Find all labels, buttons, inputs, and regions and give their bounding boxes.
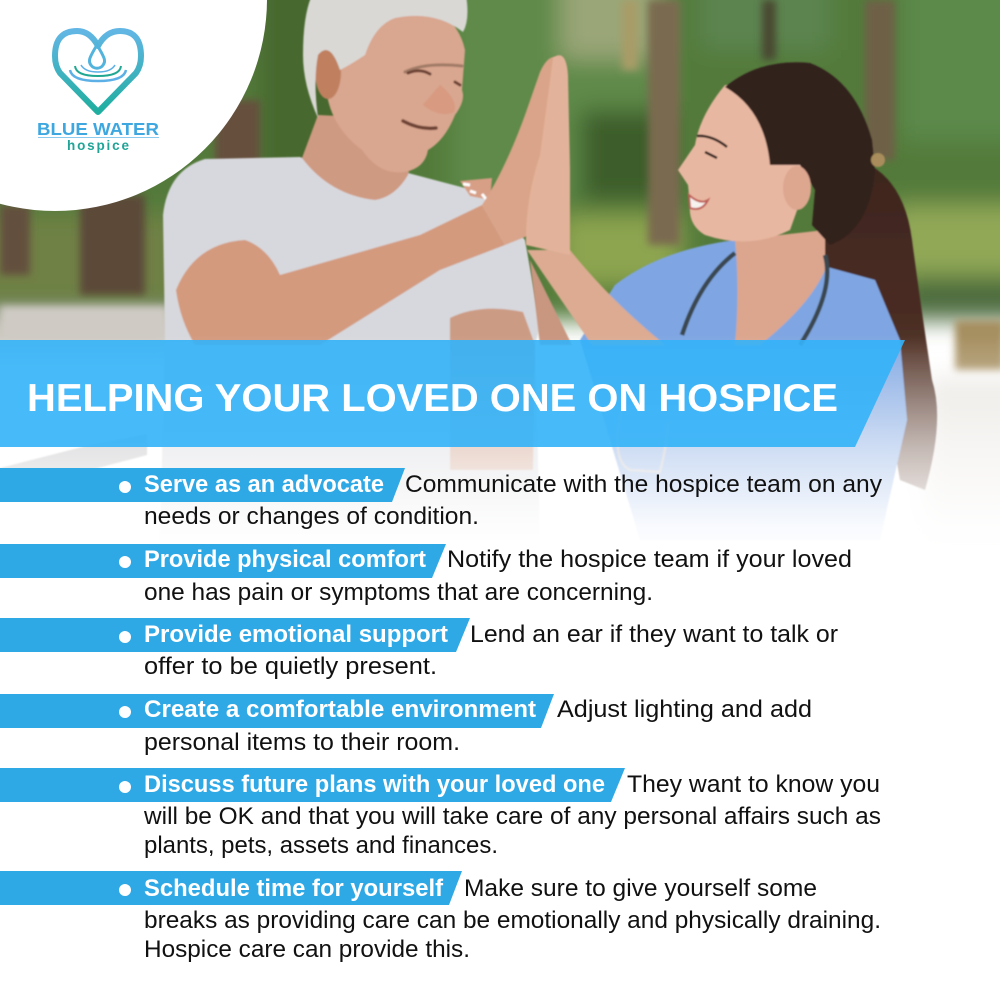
item: discuss future plans: will be OK and that you will take care of any personal affairs such as	[143, 803, 881, 830]
ponytail	[815, 165, 937, 490]
item: provide emotional support: Provide emotional support	[144, 621, 448, 648]
woman brow eye and smile	[697, 136, 727, 158]
photo: woman	[526, 55, 937, 540]
logo tagline: hospice	[67, 138, 129, 153]
item: create a comfortable environment: personal items to their room.	[144, 729, 460, 756]
hair clip	[871, 153, 885, 167]
woman ear	[783, 166, 811, 210]
item: serve as an advocate: needs or changes of condition.	[144, 503, 479, 530]
item: provide physical comfort: Notify the hospice team if your loved	[447, 546, 852, 573]
woman hand	[526, 55, 570, 255]
item: discuss future plans	[0, 768, 881, 859]
title: HELPING YOUR LOVED ONE ON HOSPICE	[27, 377, 838, 420]
man hair	[303, 0, 467, 118]
man arm	[176, 205, 505, 345]
item: serve as an advocate: Communicate with the hospice team on any	[405, 471, 883, 498]
item: provide emotional support: Lend an ear if they want to talk or	[470, 621, 838, 648]
item: schedule time for yourself: breaks as providing care can be emotionally and physically draining.	[144, 907, 881, 934]
logo wordmark: BLUE WATER	[37, 119, 159, 139]
stethoscope	[682, 253, 827, 345]
photo: man	[160, 0, 564, 540]
white fade at base of photo	[0, 335, 1000, 560]
man neck	[302, 115, 420, 200]
man ear	[315, 45, 341, 99]
item: create a comfortable environment	[0, 694, 812, 756]
item: serve as an advocate: Serve as an advocate	[144, 471, 384, 498]
item: provide emotional support: offer to be quietly present.	[144, 653, 437, 680]
item: schedule time for yourself: Hospice care can provide this.	[144, 936, 470, 963]
item: create a comfortable environment: Adjust lighting and add	[557, 696, 812, 723]
item: provide physical comfort: one has pain or symptoms that are concerning.	[144, 579, 653, 606]
woman neck and chest	[735, 230, 825, 345]
item: schedule time for yourself: Make sure to give yourself some	[464, 875, 817, 902]
woman hair	[725, 62, 875, 245]
woman face	[678, 85, 815, 241]
man head	[322, 5, 465, 173]
item: serve as an advocate	[0, 468, 883, 530]
title banner	[0, 340, 905, 447]
man nose	[423, 85, 455, 114]
item: discuss future plans: Discuss future plans with your loved one	[144, 771, 605, 798]
item: provide physical comfort	[0, 544, 852, 606]
item: discuss future plans: plants, pets, assets and finances.	[144, 832, 498, 859]
man brow eye and smile	[403, 65, 462, 128]
scrubs	[580, 240, 907, 540]
man hand	[482, 57, 564, 245]
item: provide physical comfort: Provide physical comfort	[144, 546, 426, 573]
item: schedule time for yourself	[0, 871, 881, 963]
nurse fingers on shoulder	[460, 178, 492, 200]
man lower arm	[450, 309, 535, 470]
white lower background	[0, 560, 1000, 1000]
wheelchair armrest	[0, 434, 147, 500]
item: provide emotional support	[0, 618, 838, 680]
item: create a comfortable environment: Create a comfortable environment	[144, 696, 536, 723]
logo panel: white circle	[0, 0, 267, 211]
item: discuss future plans: They want to know you	[627, 771, 880, 798]
icon: heart with water drop	[55, 31, 141, 112]
woman forearm	[527, 250, 665, 345]
item: schedule time for yourself: Schedule time for yourself	[144, 875, 444, 902]
woman other arm	[530, 260, 572, 345]
logo	[37, 31, 159, 153]
man t-shirt	[160, 157, 540, 540]
